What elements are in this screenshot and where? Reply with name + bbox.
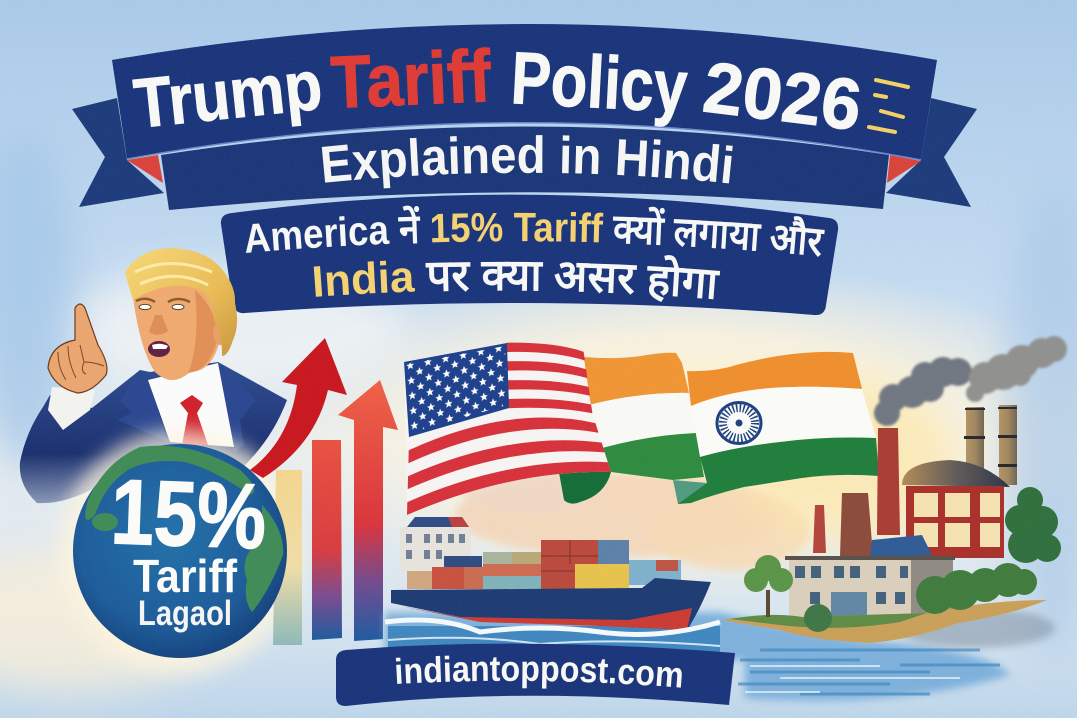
short red chimney [813,505,826,553]
front panel white [691,387,876,457]
heading word: Policy: Policy [509,36,689,128]
ribbon left tail [72,98,164,207]
website address: indiantoppost.com [396,656,682,689]
canton [404,343,509,437]
heading word: Trump: Trump [130,46,326,143]
cargo ship scene [385,517,720,646]
heading word: Tariff: Tariff [329,34,493,124]
neck and face [133,278,220,380]
badge label: Lagaol: Lagaol [138,594,232,633]
flag: India [558,352,879,504]
rear fold green [558,455,611,504]
badge label: Tariff: Tariff [133,550,238,602]
website banner [336,644,735,706]
subheading: Explained in Hindi: Explained in Hindi [322,135,733,188]
white field [404,343,611,515]
bar: yellow [273,470,302,645]
hand [48,304,107,393]
domed red building [902,460,1010,558]
heading word: 2026: 2026 [699,47,866,146]
factory scene [722,336,1067,643]
port building [400,517,471,572]
soft glow around the globe [58,430,302,674]
icon: yellow speed lines [869,80,908,132]
tie [180,395,208,445]
subtitle panel [220,194,838,316]
containers [407,540,681,589]
blue annex roof [870,535,932,558]
front panel orange [687,352,862,406]
globe badge [73,444,287,658]
tail fold [673,480,707,504]
title ribbon [72,24,977,210]
eyes [139,304,184,310]
tan chimneys [964,405,1017,485]
banner shape [336,644,735,706]
main ribbon band [112,24,937,160]
icon: ashoka chakra [717,402,761,444]
nose [149,315,168,335]
cuff [48,387,95,430]
ship hull [391,578,711,630]
badge value: 15% [109,461,268,568]
suit [20,362,287,503]
rear panel green [602,433,704,480]
rear panel white [589,393,696,448]
water under the ship and to the right [385,608,1055,700]
front panel green [678,438,879,504]
left red fold [127,155,163,183]
brown chimney [840,493,873,556]
flag: USA [404,343,611,515]
ear [213,321,227,345]
red stripes [407,343,611,515]
brows [136,299,190,302]
hair [125,248,237,356]
arrow: straight rising [338,380,398,641]
land masses [85,446,283,612]
mouth [148,341,170,357]
subtitle line one: America नें 15% Tariff क्यों लगाया और [246,206,825,257]
illustration: Trump pointing [20,248,287,503]
rear panel orange [584,353,689,405]
subtitle line two: India पर क्या असर होगा [314,255,720,302]
foam [385,620,720,634]
smoke plumes [874,336,1067,426]
hull red boot [400,606,692,630]
bar: red [312,440,342,640]
lower ribbon band [161,126,889,210]
tall red chimney [877,428,900,535]
ribbon right tail [886,98,977,207]
panel shape [221,195,838,315]
bushes and trees [744,487,1061,632]
right red fold [887,155,921,183]
ripple [388,638,720,646]
shirt [148,363,234,447]
shoreline [722,600,1047,643]
arrow: curved red [250,338,347,478]
rising bar chart [250,338,398,645]
stars [406,346,507,433]
globe sphere [73,444,287,658]
main factory building [785,556,955,619]
